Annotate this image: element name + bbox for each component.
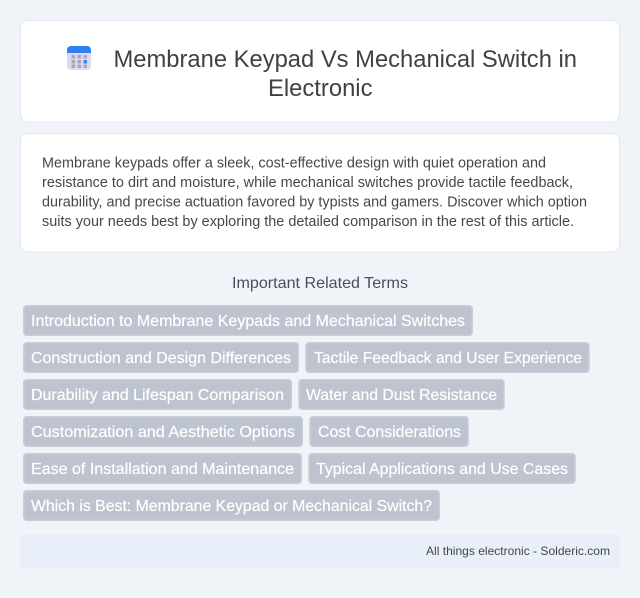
tag: customization bbox=[24, 417, 302, 446]
tag: tactile feedback bbox=[306, 343, 589, 372]
tag: installation bbox=[24, 454, 301, 483]
tag: construction bbox=[24, 343, 298, 372]
icon: calendar keypad bbox=[67, 46, 91, 70]
footer: All things electronic - Solderic.com bbox=[426, 544, 610, 558]
tag: water and dust: Water and Dust Resistance bbox=[306, 387, 497, 404]
tag: cost bbox=[310, 417, 468, 446]
tag: introduction: Introduction to Membrane Keypads and Mechanical Switches bbox=[31, 313, 465, 330]
panel: summary paragraph bbox=[20, 134, 620, 252]
title: Electronic bbox=[268, 75, 372, 102]
panel: related term tags bbox=[24, 306, 589, 520]
tag: customization: Customization and Aesthetic Options bbox=[31, 424, 295, 441]
panel: summary paragraph: suits your needs best by exploring the detailed comparison in the rest of this article. bbox=[42, 214, 574, 230]
tag: durability: Durability and Lifespan Comparison bbox=[31, 387, 284, 404]
tag: water and dust bbox=[299, 380, 504, 409]
tag: cost: Cost Considerations bbox=[318, 424, 461, 441]
title: Membrane Keypad Vs Mechanical Switch in bbox=[114, 46, 577, 73]
tag: applications: Typical Applications and Use Cases bbox=[316, 461, 568, 478]
tag: tactile feedback: Tactile Feedback and User Experience bbox=[314, 350, 582, 367]
tag: installation: Ease of Installation and Maintenance bbox=[31, 461, 294, 478]
tag: applications bbox=[309, 454, 575, 483]
footer bbox=[20, 534, 620, 568]
tag: introduction bbox=[24, 306, 472, 335]
tag: which is best bbox=[24, 491, 439, 520]
tag: construction: Construction and Design Differences bbox=[31, 350, 291, 367]
panel: title card bbox=[20, 20, 620, 122]
panel: summary paragraph: resistance to dirt and moisture, while mechanical switches provide tactile feedback, bbox=[42, 175, 573, 191]
heading: important related terms: Important Related Terms bbox=[232, 275, 408, 292]
panel: summary paragraph: Membrane keypads offer a sleek, cost-effective design with quiet operation and bbox=[42, 156, 546, 172]
panel: summary paragraph: durability, and precise actuation favored by typists and gamers. Discover which option bbox=[42, 194, 587, 210]
tag: which is best: Which is Best: Membrane Keypad or Mechanical Switch? bbox=[31, 498, 432, 515]
tag: durability bbox=[24, 380, 291, 409]
title bbox=[114, 46, 577, 102]
